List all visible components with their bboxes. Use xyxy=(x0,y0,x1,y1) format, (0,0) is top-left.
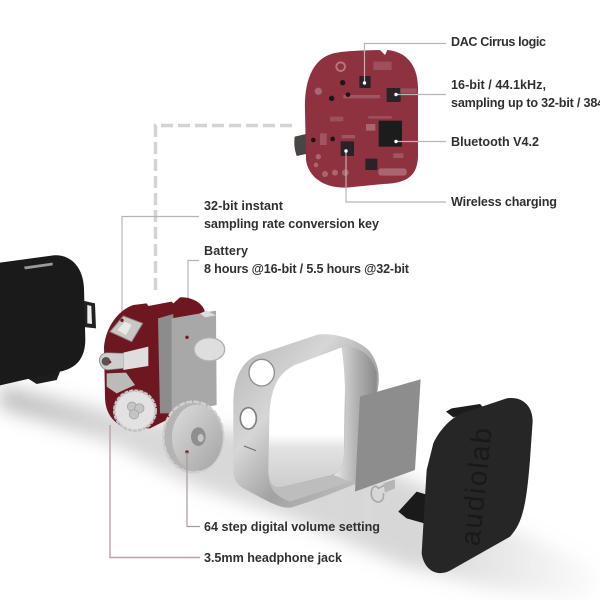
callout line: headphone jack xyxy=(110,425,200,558)
audiolab logo: audiolab xyxy=(454,426,498,547)
label: headphone jack: 3.5mm headphone jack xyxy=(204,551,343,565)
charging chip xyxy=(341,141,354,156)
top and bottom latches xyxy=(21,258,55,271)
small knob xyxy=(114,391,156,431)
label: DAC Cirrus logic: DAC Cirrus logic xyxy=(451,35,546,49)
callout line: Bluetooth xyxy=(396,140,446,142)
label: battery: 8 hours @16-bit / 5.5 hours @32-bit xyxy=(204,262,410,276)
mounting holes xyxy=(311,80,350,142)
callout lines: circuit board xyxy=(346,44,446,202)
callout line: DAC xyxy=(364,44,446,82)
small knob body xyxy=(114,391,156,431)
front cap xyxy=(398,398,533,573)
silver button xyxy=(194,338,225,361)
label: conversion key: sampling rate conversion key xyxy=(204,217,379,231)
jack dot xyxy=(109,361,111,363)
callout dots: circuit board xyxy=(344,81,398,153)
ground shadow xyxy=(0,385,600,600)
bracket xyxy=(107,373,135,393)
small chip xyxy=(365,159,377,170)
inner bottom wall xyxy=(268,475,352,502)
metal frame xyxy=(233,334,421,508)
label: volume setting: 64 step digital volume setting xyxy=(204,520,380,534)
small knob logo xyxy=(127,402,144,419)
cover body xyxy=(0,255,85,385)
wire plug xyxy=(383,479,395,493)
label: sampling rate: 16-bit / 44.1kHz, xyxy=(451,78,546,92)
label: Wireless charging: Wireless charging xyxy=(451,195,557,209)
wheel rim xyxy=(163,402,223,472)
frame outer xyxy=(233,334,379,508)
right clip xyxy=(80,300,96,328)
DAC chip xyxy=(359,76,371,88)
board outline xyxy=(305,50,418,188)
chips xyxy=(341,76,402,170)
volume dot xyxy=(185,450,189,454)
callout line: sampling xyxy=(396,94,446,96)
callout line: battery xyxy=(188,260,199,337)
converter chip xyxy=(387,88,401,102)
top latch highlight xyxy=(24,263,53,269)
headphone jack xyxy=(99,353,123,370)
battery dot xyxy=(185,336,189,339)
callout line: volume xyxy=(187,452,200,526)
key dot xyxy=(120,319,124,322)
Bluetooth chip xyxy=(379,121,402,147)
wireless charging plate xyxy=(355,379,421,492)
cap body xyxy=(422,398,533,573)
inner right wall xyxy=(333,347,377,482)
label: Bluetooth V4.2: Bluetooth V4.2 xyxy=(451,135,539,149)
upper port hole xyxy=(249,359,274,386)
connector wire xyxy=(371,483,388,502)
switch slider xyxy=(117,322,132,335)
large volume wheel xyxy=(163,402,223,472)
metal strip xyxy=(123,347,148,370)
frame opening xyxy=(268,347,345,487)
conversion key switch xyxy=(110,316,143,342)
circuit board xyxy=(294,50,418,188)
wheel face xyxy=(172,405,223,471)
red housing xyxy=(104,297,205,428)
battery top corner xyxy=(200,311,216,317)
battery front xyxy=(172,311,217,414)
lower port hole xyxy=(240,408,256,429)
wheel hub xyxy=(191,427,206,446)
cap peg xyxy=(398,492,433,524)
label: conversion key: 32-bit instant xyxy=(204,199,284,213)
black back cover xyxy=(0,255,96,385)
solder pads xyxy=(314,62,417,177)
callout line: wireless charging xyxy=(346,152,446,202)
cap top latch xyxy=(446,404,483,417)
battery side xyxy=(158,314,173,413)
indicator slot xyxy=(244,446,256,451)
headphone jack on board xyxy=(294,134,306,156)
jack socket xyxy=(102,357,110,366)
main board assembly xyxy=(99,297,225,472)
dashed assembly guide xyxy=(156,126,292,292)
callout line: conversion key xyxy=(122,216,199,318)
label: battery: Battery xyxy=(204,244,248,258)
